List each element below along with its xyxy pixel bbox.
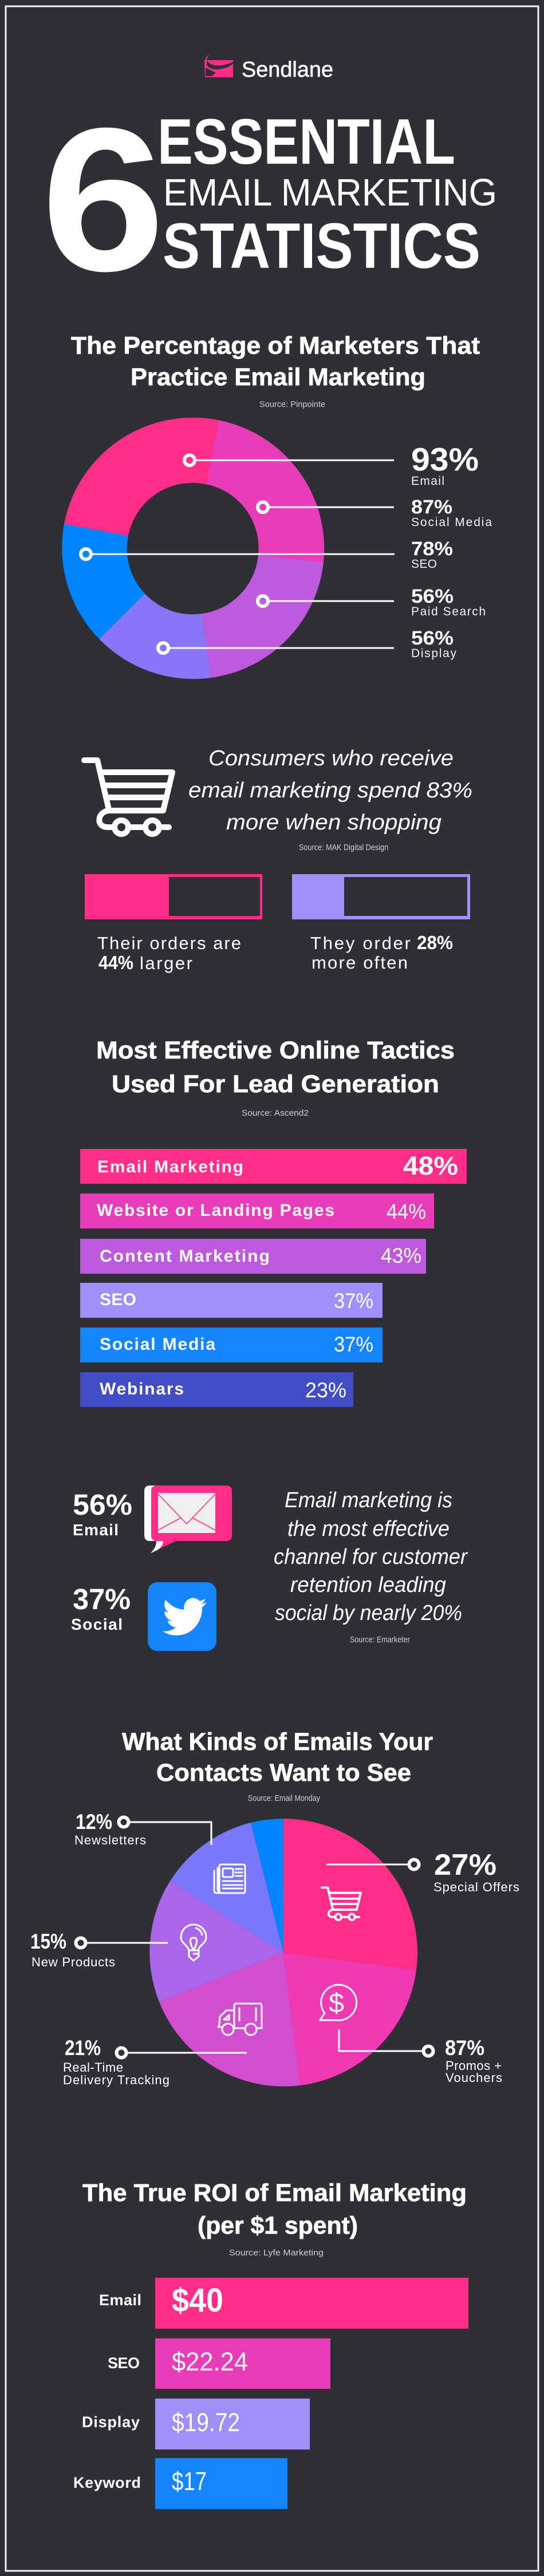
icon: newspaper [214, 1864, 245, 1893]
callout: newsletters 12% [74, 1810, 211, 1847]
heading: online tactics: Used For Lead Generation [112, 1070, 439, 1098]
text: their orders: Their orders are [97, 933, 241, 953]
panel: customer retention [71, 1485, 468, 1651]
bar: email marketing [80, 1149, 467, 1184]
callout: special offers 27%: Special Offers [433, 1880, 519, 1894]
bar: seo $22.24 [108, 2338, 330, 2389]
bar: email marketing: 48% [403, 1151, 458, 1180]
logo: Sendlane [204, 54, 333, 82]
icon: delivery truck [218, 2004, 262, 2035]
statement: most effective channel: social by nearly 20% [275, 1601, 462, 1625]
stat: seo 78%: SEO [411, 558, 437, 571]
icon: light bulb [181, 1925, 206, 1961]
bar: email $40: Email [99, 2291, 141, 2309]
callout: real-time delivery tracking 21%: Delivery Tracking [63, 2073, 169, 2087]
bar: webinars: Webinars [100, 1380, 184, 1398]
source: Email Monday: Source: Email Monday [248, 1793, 320, 1803]
bar: website or landing pages: 44% [387, 1200, 426, 1223]
callout: promos and vouchers 87%: Promos + [446, 2059, 502, 2073]
statement: most effective channel: retention leading [290, 1573, 446, 1597]
statement: most effective channel: the most effective [287, 1517, 450, 1541]
source: MAK Digital Design: Source: MAK Digital Design [299, 843, 388, 852]
callout: real-time delivery tracking 21% [63, 2036, 247, 2087]
stat: social media 87% [411, 496, 492, 529]
bar: seo $22.24: SEO [108, 2354, 140, 2372]
heading: online tactics [96, 1037, 455, 1098]
bar: seo: SEO [100, 1290, 136, 1309]
bar: content marketing [80, 1239, 426, 1274]
callout: new products 15% [30, 1930, 168, 1969]
text: their orders: larger [140, 953, 192, 973]
stat: social 37%: Social [71, 1615, 123, 1633]
stat: paid search 56%: Paid Search [411, 605, 486, 618]
statement: most effective channel: Email marketing is [285, 1488, 452, 1512]
callout: real-time delivery tracking 21%: 21% [65, 2036, 101, 2060]
stat: seo 78%: 78% [411, 538, 453, 560]
main title [41, 85, 497, 314]
stat: social media 87%: 87% [411, 496, 452, 518]
bar: email $40: $40 [172, 2282, 223, 2319]
text: they order [310, 932, 453, 973]
bar: webinars: 23% [305, 1378, 346, 1402]
callout lines [81, 455, 395, 653]
heading: true ROI [82, 2179, 467, 2239]
progress bar: 44% [85, 874, 262, 919]
stat: seo 78% [411, 538, 453, 571]
main title: ESSENTIAL [157, 106, 455, 177]
source: Emarketer: Source: Emarketer [350, 1635, 410, 1645]
bar: email marketing: Email Marketing [97, 1157, 243, 1176]
bar: social media: Social Media [100, 1335, 215, 1354]
heading: percentage of marketers: The Percentage of Marketers That [71, 332, 480, 359]
bar: social media: 37% [334, 1333, 373, 1356]
bar: seo $22.24: $22.24 [172, 2347, 248, 2376]
callout: newsletters 12%: 12% [76, 1810, 112, 1834]
bar: display $19.72: Display [82, 2413, 140, 2431]
heading: kinds of emails: What Kinds of Emails Your [122, 1728, 433, 1756]
stat: email 93%: 93% [411, 441, 479, 478]
main title: 6 [41, 85, 165, 314]
bar: display $19.72: $19.72 [172, 2408, 240, 2437]
text: they order: 28% [417, 932, 453, 953]
heading: true ROI: The True ROI of Email Marketing [82, 2179, 467, 2207]
progress bar: 28% [292, 874, 470, 919]
text: they order: more often [312, 953, 408, 973]
stat: display 56%: Display [411, 647, 457, 660]
heading: kinds of emails [122, 1728, 433, 1787]
stat: display 56% [411, 627, 457, 660]
callout: real-time delivery tracking 21%: Real-Time [63, 2060, 123, 2075]
callout: promos and vouchers 87%: Vouchers [446, 2071, 502, 2085]
main title: EMAIL MARKETING [163, 171, 497, 214]
statement: consumers spend 83% more [188, 746, 472, 835]
bar: seo [80, 1283, 383, 1318]
stat: social 37%: 37% [73, 1583, 131, 1615]
stat: email 56% [73, 1488, 132, 1539]
bar: keyword $17 [73, 2458, 287, 2509]
bar: website or landing pages: Website or Landing Pages [97, 1201, 334, 1220]
icon: cart [322, 1887, 361, 1920]
heading: true ROI: (per $1 spent) [198, 2212, 358, 2239]
stat: paid search 56%: 56% [411, 586, 454, 607]
icon: email speech bubble [144, 1485, 232, 1553]
panel: true ROI [73, 2179, 468, 2509]
heading: percentage of marketers: Practice Email Marketing [131, 364, 425, 391]
donut chart [62, 418, 324, 679]
panel: kinds of emails [30, 1728, 519, 2087]
statement: consumers spend 83% more: more when shopping [226, 811, 441, 835]
text: their orders: 44% [98, 952, 133, 973]
callout: special offers 27%: 27% [434, 1848, 496, 1882]
icon: dollar chat bubble [320, 1985, 357, 2020]
bar: website or landing pages [80, 1194, 434, 1228]
stat: paid search 56% [411, 586, 486, 618]
icon: shopping cart [84, 760, 172, 834]
text: they order: They order [310, 933, 411, 953]
callout: promos and vouchers 87% [339, 2029, 502, 2085]
callout: promos and vouchers 87%: 87% [445, 2036, 484, 2060]
source: Lyfe Marketing: Source: Lyfe Marketing [229, 2248, 324, 2258]
statement: consumers spend 83% more: Consumers who receive [208, 746, 454, 771]
heading: online tactics: Most Effective Online Tactics [96, 1037, 455, 1064]
icon: twitter [148, 1582, 216, 1651]
pie chart [149, 1819, 417, 2087]
statement: most effective channel [274, 1488, 468, 1625]
callout: special offers 27% [326, 1848, 519, 1894]
statement: consumers spend 83% more: email marketing spend 83% [188, 779, 472, 803]
stat: email 93%: Email [411, 475, 444, 488]
bar: content marketing: 43% [381, 1244, 421, 1267]
callout: new products 15%: New Products [31, 1955, 115, 1969]
stat: social media 87%: Social Media [411, 516, 492, 529]
callout: newsletters 12%: Newsletters [74, 1833, 146, 1847]
heading: kinds of emails: Contacts Want to See [156, 1759, 411, 1787]
panel: consumers spend more [84, 746, 472, 973]
bar: content marketing: Content Marketing [100, 1247, 270, 1266]
main title: STATISTICS [163, 210, 480, 282]
stat: email 56%: 56% [73, 1488, 132, 1521]
stat: email 56%: Email [73, 1521, 119, 1539]
text: their orders [97, 933, 241, 973]
bar: social media [80, 1327, 383, 1362]
bar: keyword $17: $17 [172, 2467, 207, 2496]
source: Ascend2: Source: Ascend2 [242, 1108, 309, 1118]
heading: percentage of marketers [71, 332, 480, 391]
callout: new products 15%: 15% [30, 1930, 66, 1953]
bar: webinars [80, 1372, 353, 1407]
panel: percentage of marketers [62, 332, 492, 679]
bar: display $19.72 [82, 2399, 310, 2449]
logo: Sendlane: Sendlane [242, 58, 333, 82]
panel: online tactics [80, 1037, 467, 1407]
source: Pinpointe: Source: Pinpointe [259, 400, 325, 409]
bar: seo: 37% [334, 1289, 373, 1313]
bar: keyword $17: Keyword [73, 2474, 141, 2491]
stat: display 56%: 56% [411, 627, 454, 649]
bar: email $40 [99, 2278, 468, 2329]
stat: social 37% [71, 1583, 131, 1633]
icon: dollar chat bubble: $ [329, 1988, 344, 2018]
statement: most effective channel: channel for customer [274, 1545, 468, 1569]
